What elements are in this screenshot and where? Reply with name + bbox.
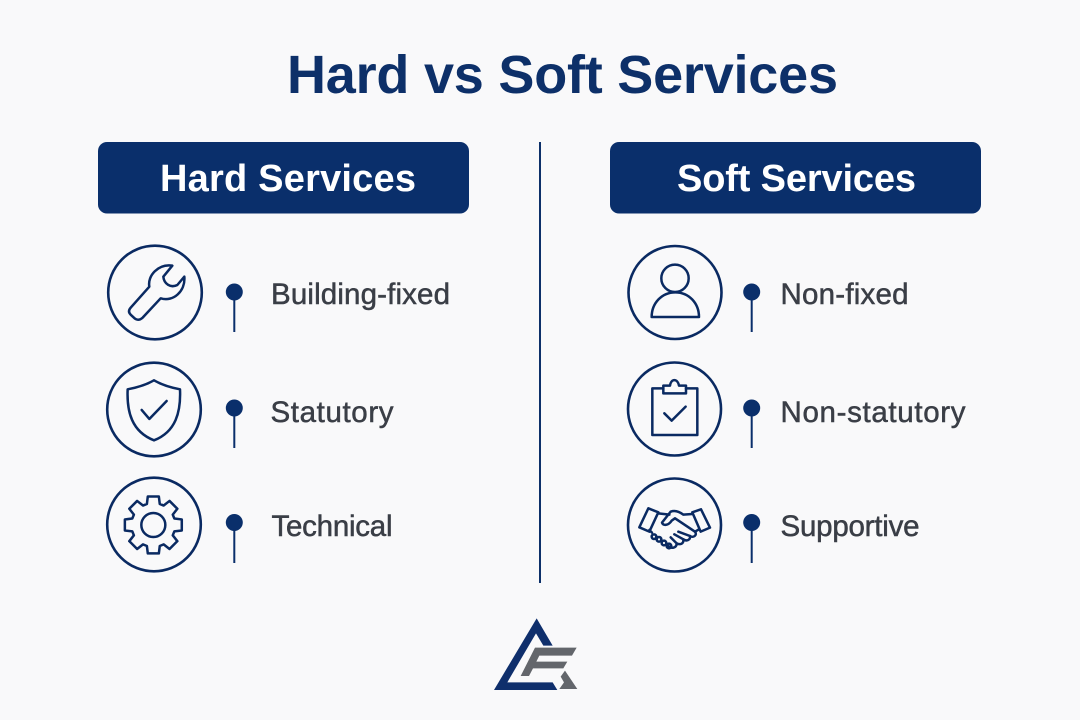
pin: supportive [743,514,760,563]
icon: person [628,246,722,339]
label: non-fixed: Non-fixed [780,278,908,311]
heading: soft services [610,142,981,214]
title: Hard vs Soft Services [287,45,838,105]
icon: gear [107,478,201,571]
label: non-statutory: Non-statutory [780,396,966,429]
pin: statutory [226,400,243,448]
panel: hard services [98,142,469,571]
label: technical: Technical [272,510,392,543]
vertical divider [539,142,541,583]
pin: technical [226,514,243,563]
pin: building-fixed [226,284,243,332]
icon: wrench [108,246,202,339]
heading: soft services: Soft Services [677,158,916,200]
pin: non-fixed [743,284,760,332]
label: building-fixed: Building-fixed [271,278,450,311]
icon: handshake [628,478,721,572]
heading: hard services: Hard Services [160,158,416,200]
icon: clipboard with check [628,362,721,456]
icon: shield with check [107,363,201,456]
panel: soft services [610,142,981,572]
heading: hard services [98,142,469,214]
label: supportive: Supportive [780,510,920,543]
label: statutory: Statutory [270,396,394,429]
logo [494,618,577,690]
pin: non-statutory [743,400,760,448]
